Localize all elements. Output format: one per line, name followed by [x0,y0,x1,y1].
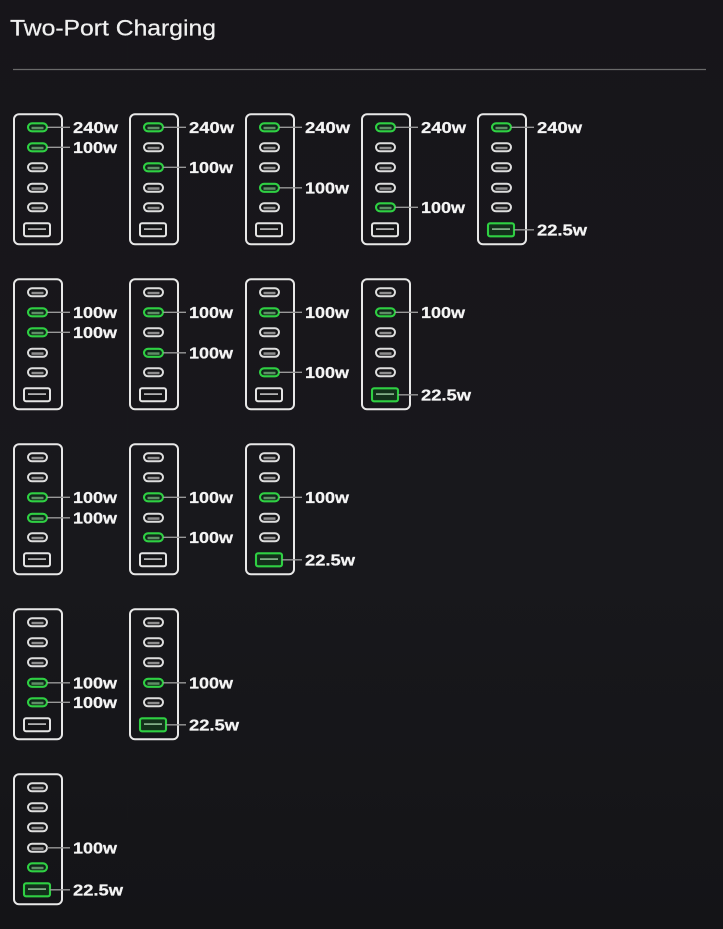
charger body with ports [14,609,62,739]
charger: 100w and 100w, ports 2 and 3 [14,279,118,409]
charger: 240w and 22.5w, port 1 and USB-A [478,114,588,244]
label: 100w: 100w [73,675,118,692]
charger body with ports [130,114,178,244]
charger body with ports [362,279,410,409]
label: 240w: 240w [73,120,119,137]
label: 100w: 100w [189,490,234,507]
charger body with ports [14,279,62,409]
charger: 100w and 100w, ports 2 and 4 [130,279,234,409]
label: 100w: 100w [189,305,234,322]
charger body with ports [246,444,294,574]
label: 22.5w: 22.5w [305,552,356,569]
charger body with ports [14,114,62,244]
charger body with ports [130,609,178,739]
label: 100w: 100w [189,530,234,547]
label: 22.5w: 22.5w [189,717,240,734]
charger body with ports [478,114,526,244]
charger body with ports [246,279,294,409]
label: 100w: 100w [189,160,234,177]
label: 100w: 100w [73,305,118,322]
charger body with ports [362,114,410,244]
label: 22.5w: 22.5w [421,387,472,404]
label: 240w: 240w [189,120,235,137]
charger body with ports [130,279,178,409]
charger: 100w and 100w, ports 3 and 5 [130,444,234,574]
label: 100w: 100w [73,140,118,157]
charger: 240w and 100w, ports 1 and 4 [246,114,351,244]
label: 100w: 100w [421,200,466,217]
label: 240w: 240w [537,120,583,137]
label: 100w: 100w [73,325,118,342]
title: Two-Port Charging [10,16,216,40]
charger body with ports [246,114,294,244]
label: 100w: 100w [189,345,234,362]
charger body with ports [14,444,62,574]
label: 100w: 100w [305,180,350,197]
label: 100w: 100w [305,490,350,507]
charger: 240w and 100w, ports 1 and 2 [14,114,119,244]
charger: 100w and 100w, ports 3 and 4 [14,444,118,574]
label: 22.5w: 22.5w [73,882,124,899]
label: 100w: 100w [421,305,466,322]
label: 100w: 100w [189,675,234,692]
label: 240w: 240w [421,120,467,137]
label: 240w: 240w [305,120,351,137]
charger body with ports [130,444,178,574]
label: 100w: 100w [73,695,118,712]
label: 22.5w: 22.5w [537,222,588,239]
charger: 100w and 22.5w, port 3 and USB-A [246,444,356,574]
label: 100w: 100w [305,365,350,382]
label: 100w: 100w [73,490,118,507]
charger: 100w and 100w, ports 2 and 5 [246,279,350,409]
charger: 100w and 22.5w, port 2 and USB-A [362,279,472,409]
charger: 100w and 22.5w, port 4 line with ports 5 and USB-A lit [14,774,124,904]
label: 100w: 100w [305,305,350,322]
charger: 100w and 22.5w, port 4 and USB-A [130,609,240,739]
label: 100w: 100w [73,510,118,527]
charger: 100w and 100w, ports 4 and 5 [14,609,118,739]
charger: 240w and 100w, ports 1 and 5 [362,114,467,244]
charger: 240w and 100w, ports 1 and 3 [130,114,235,244]
label: 100w: 100w [73,840,118,857]
charger body with ports [14,774,62,904]
